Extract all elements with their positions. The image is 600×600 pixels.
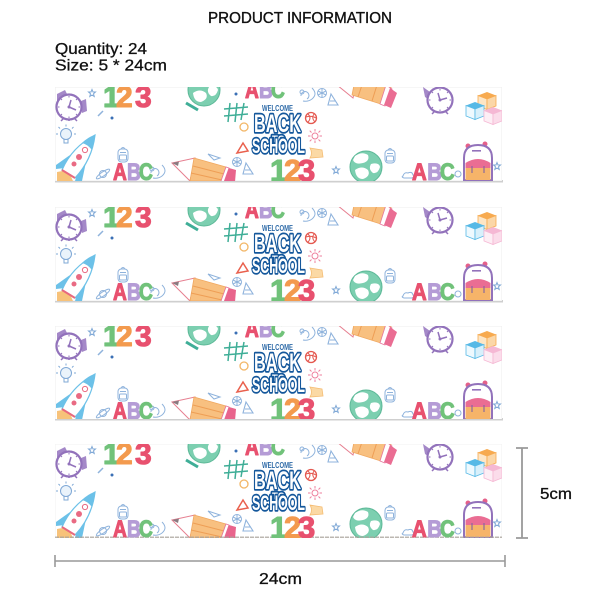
welcome back to school logo: TO — [272, 134, 285, 146]
welcome back to school logo — [252, 461, 305, 515]
top numbers: 123 — [103, 438, 152, 471]
bottom right letters: ABC — [412, 397, 455, 424]
quantity text: Quantity: 24 — [55, 41, 147, 58]
strip 1 shadow — [55, 180, 503, 182]
bottom numbers: 123 — [270, 153, 315, 188]
bottom right letters: ABC — [412, 515, 455, 542]
welcome back to school logo: SCHOOL — [252, 255, 305, 278]
welcome back to school logo: TO — [272, 491, 285, 503]
welcome back to school logo — [252, 224, 305, 278]
strip 2 shadow — [55, 300, 503, 302]
bottom right letters: ABC — [412, 278, 455, 305]
width label: 24cm — [259, 571, 302, 588]
welcome back to school logo: BACK — [254, 230, 301, 258]
strip 3 — [55, 315, 502, 427]
title: PRODUCT INFORMATION — [208, 10, 392, 27]
width dimension arrow — [55, 555, 505, 567]
strip 2 — [55, 196, 502, 308]
top numbers: 123 — [103, 201, 152, 234]
top letters: ABC — [245, 315, 285, 343]
welcome back to school logo: SCHOOL — [252, 135, 305, 158]
top letters: ABC — [245, 76, 285, 104]
size text: Size: 5 * 24cm — [55, 58, 167, 74]
top letters: ABC — [245, 196, 285, 224]
top numbers: 123 — [103, 81, 152, 114]
welcome back to school logo: TO — [272, 373, 285, 385]
top letters: ABC — [245, 433, 285, 461]
welcome back to school logo — [252, 343, 305, 397]
bottom left letters: ABC — [113, 158, 153, 186]
bottom left letters: ABC — [113, 515, 153, 543]
welcome back to school logo: BACK — [254, 349, 301, 377]
strip 4 — [55, 433, 502, 545]
height dimension arrow — [516, 448, 528, 538]
welcome back to school logo: WELCOME — [262, 343, 293, 352]
welcome back to school logo — [252, 104, 305, 158]
bottom numbers: 123 — [270, 273, 315, 308]
height label: 5cm — [540, 486, 572, 503]
strip 3 shadow — [55, 418, 503, 420]
welcome back to school logo: SCHOOL — [252, 374, 305, 397]
bottom numbers: 123 — [270, 392, 315, 427]
welcome back to school logo: WELCOME — [262, 224, 293, 233]
bottom left letters: ABC — [113, 397, 153, 425]
bottom numbers: 123 — [270, 510, 315, 545]
welcome back to school logo: BACK — [254, 110, 301, 138]
welcome back to school logo: BACK — [254, 467, 301, 495]
welcome back to school logo: TO — [272, 254, 285, 266]
strip 1 — [55, 76, 502, 188]
welcome back to school logo: WELCOME — [262, 461, 293, 470]
bottom left letters: ABC — [113, 278, 153, 306]
welcome back to school logo: WELCOME — [262, 104, 293, 113]
top numbers: 123 — [103, 320, 152, 353]
welcome back to school logo: SCHOOL — [252, 492, 305, 515]
bottom right letters: ABC — [412, 158, 455, 185]
